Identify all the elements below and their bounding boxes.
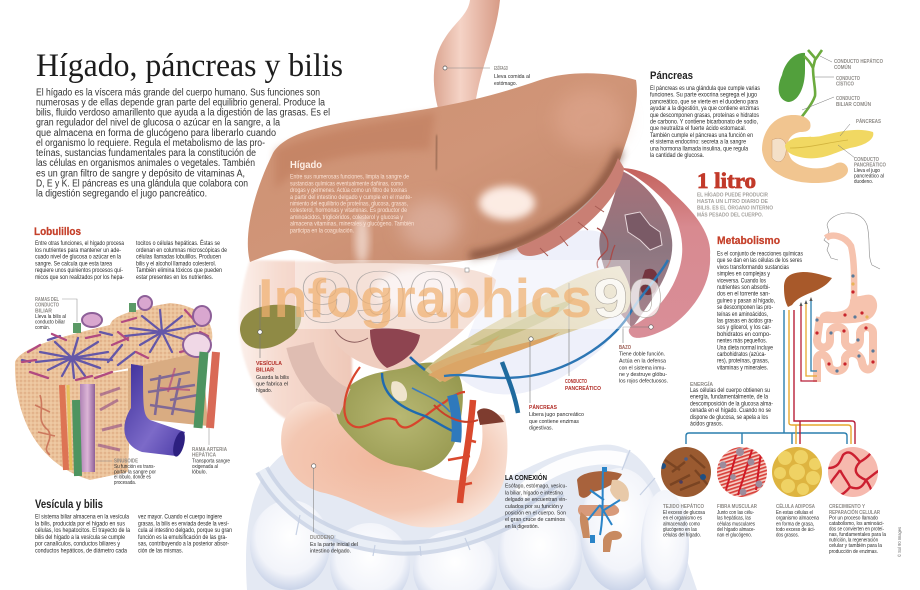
duodenum [281,401,507,527]
Metabolismo heading: Metabolismo [717,235,780,247]
lobule labels: oxigenada al [192,464,218,470]
pyloric lip [335,330,368,342]
label: spleen: ne y destruye glóbu- [619,372,667,378]
intro text block: bilis, fluido verdoso amarillento que ayuda a la digestión de las grasas. Es el [36,108,330,119]
label: spleen: con el sistema inmu- [619,365,666,371]
Energía text: descomposición de la glucosa alma- [690,400,773,407]
cell captions: celular y también para la [829,543,883,549]
Vesícula y bilis text: la bilis, producida por el hígado en sus [35,520,125,527]
Vesícula y bilis text: por canalículos, conductos biliares y [35,541,121,548]
label: spleen: Actúa en la defensa [619,358,667,364]
intestine [817,317,873,382]
gallbladder diagram labels: CONDUCTO [836,76,860,82]
Lobulillos text: ordenan en columnas microscópicas de [136,247,227,254]
Metabolismo text: nentes más pequeños. [717,338,767,345]
gallbladder diagram labels: BILIAR COMÚN [836,101,871,108]
lobule labels: RAMAS DEL [35,297,60,303]
duodenum opening [477,408,504,425]
lobule labels: Su función es trans- [114,464,155,470]
pylorus opening [370,328,420,368]
la conexión callout: en la digestión. [505,524,539,530]
gallbladder diagram labels: duodeno. [854,179,873,185]
Vesícula y bilis text: cula al intestino delgado, porque su gran [138,527,232,534]
label: liver text: sustancias químicas eventualmente dañinas, como [290,180,403,187]
label: pancreas: digestivas. [529,426,553,432]
Energía text: ENERGÍA [690,380,713,388]
side wall [15,362,132,480]
intro text block: numerosas y de ellas depende gran parte del equilibrio general. Produce la [36,97,325,108]
Metabolismo text: res), proteínas, grasas, [717,358,769,365]
lobule labels: procesada. [114,480,136,486]
pale stomach outlet [322,263,496,372]
cell captions [663,502,887,555]
label: duodenum: Es la parte inicial del [310,542,358,548]
Páncreas heading: Páncreas [650,70,693,82]
intro text block: es un gran filtro de sangre y depósito de vitaminas A, [36,168,245,179]
label: liver text [290,160,414,234]
liver brown [784,272,832,307]
Lobulillos text: tocitos o células hepáticas. Éstas se [136,240,220,247]
intro text block: el organismo lo requiere. Regula el metabolismo de las pro- [36,138,265,149]
Vesícula y bilis text: bilis del hígado a la vesícula se cumple [35,534,125,541]
lobule labels: Lleva la bilis al [35,314,66,320]
cell captions: células musculares [717,521,755,527]
gallbladder diagram labels: PÁNCREAS [856,118,881,125]
gallbladder diagram labels: COMÚN [834,64,851,71]
Metabolismo text: que se dan en las células de los seres [717,257,802,264]
Metabolismo text: guíneo y pasan al hígado, [717,297,775,304]
pancreas [425,266,631,382]
leader lines [802,56,855,158]
label: pancreas: PÁNCREAS [529,404,557,411]
1 litro callout: 1 litro [697,168,756,193]
right vessels [198,352,204,428]
label: esophagus [443,64,530,87]
label: duodenum: intestino delgado. [310,548,351,554]
label: liver text: Hígado [290,160,322,171]
gallbladder diagram labels: PANCREÁTICO [854,162,886,169]
Metabolismo text: se descomponen las pro- [717,304,773,311]
label: liver text: Entre sus numerosas funciones, limpia la sangre de [290,174,410,181]
label: liver text: almacena vitaminas, minerales y glucógeno. También [290,221,414,228]
label: pancreas [529,337,584,432]
cell captions: En estas células el [776,510,813,516]
Vesícula y bilis text: vez mayor. Cuando el cuerpo ingiere [138,514,222,521]
Páncreas text: pancreático, que se vierte en el duodeno para [650,98,758,105]
intro text block [36,87,330,200]
lobule labels: RAMA ARTERIA [192,447,227,453]
ducts [801,50,822,118]
cell captions: Junto con las célu- [717,510,754,516]
gallbladder [240,305,301,349]
stomach fold [517,158,624,256]
lobule labels: BILIAR [35,308,52,314]
1 litro callout: BILIS. ES EL ÓRGANO INTERNO [697,204,773,212]
Metabolismo text: sos y glicerol, y los car- [717,324,771,331]
watermark: 990 [300,258,460,338]
left vessels [62,385,66,470]
lobule labels: el lóbulo, donde es [114,475,151,481]
intro text block: gran regulador del nivel de glucosa o azúcar en la sangre, a la [36,118,280,129]
title: Hígado, páncreas y bilis [36,48,343,84]
cell captions: células del hígado. [663,532,701,538]
Páncreas text: funciones. Su parte exocrina segrega el jugo [650,92,757,99]
Energía text [690,380,773,428]
label: pancreatic duct: CONDUCTO [565,379,587,385]
cell captions: dos se convierten en proteí- [829,527,884,533]
label: spleen: Tiene doble función. [619,352,665,358]
label: pancreas: que contiene enzimas [529,419,579,425]
gallbladder diagram labels: CONDUCTO [836,96,860,102]
gallbladder diagram labels: Lleva el jugo [854,168,880,174]
Lobulillos heading: Lobulillos [34,226,81,238]
cell captions: CRECIMIENTO Y [829,504,865,510]
cell captions: almacenado como [663,521,700,527]
stomach interior [597,170,672,328]
lobule labels: Transporta sangre [192,459,230,465]
Lobulillos text: los nutrientes para mantener un ade- [35,247,121,254]
peritoneum white-blue [455,230,632,394]
cell captions: en forma de grasa, [776,521,814,527]
Metabolismo text: carbohidratos (azúca- [717,351,766,358]
Páncreas text: la cantidad de glucosa. [650,152,704,159]
stomach [820,295,877,323]
cell captions: producción de enzimas. [829,549,878,555]
la conexión callout: Esófago, estómago, vesícu- [505,484,567,490]
Páncreas text: También cumple el páncreas una función en [650,132,753,139]
label: spleen [619,325,668,385]
esophagus [434,0,500,115]
cell captions: CÉLULA ADIPOSA [776,502,815,510]
label: pancreas: Libera jugo pancreático [529,412,584,418]
watermark [258,258,663,338]
Páncreas text: de carbono. Y contiene bicarbonato de sodio, [650,118,758,126]
label: duodenum: DUODENO [310,535,334,541]
nutrient dots [815,274,875,373]
label: spleen: los rojos defectuosos. [619,379,668,385]
Vesícula y bilis text: ción de las mismas. [138,547,183,554]
Páncreas text [650,85,760,159]
Páncreas text: una hormona llamada insulina, que regula [650,145,748,152]
cell captions: Por un proceso llamado [829,516,878,522]
central vein L [124,364,185,456]
cell captions: en el organismo es [663,516,702,522]
Páncreas text: el sistema endocrino: secreta a la sangre [650,139,746,146]
cell circle: liver tissue [660,447,711,497]
Lobulillos text: Entre otras funciones, el hígado procesa [35,240,124,247]
Lobulillos text: micos que son realizados por los hepa- [35,274,124,281]
copyright: © Sol 90 Images [896,526,902,557]
splenic vein [444,260,668,378]
label: gallbladder: BILIAR [256,368,274,374]
lobule labels: común. [35,325,50,331]
label: esophagus: Lleva comida al [494,74,530,80]
label: esophagus: estómago. [494,81,517,87]
sinusoids right [125,310,195,352]
Lobulillos text [35,240,227,281]
cell circle: muscle fiber [717,447,767,497]
label: liver text: drogas y gérmenes. Actúa como un filtro de toxinas [290,187,407,194]
lobule labels: HEPÁTICA [192,452,216,459]
olive organ [336,363,463,471]
cell captions: del hígado almace- [717,527,755,533]
label: liver text: participa en la coagulación. [290,227,354,234]
label: gallbladder: hígado. [256,388,272,394]
watermark: 90 [593,267,663,329]
gallbladder diagram labels: pancreático al [854,174,884,180]
spleen crescent [620,168,710,338]
Lobulillos text: sangre. Se calcula que esta tarea [35,260,112,267]
cell captions: glucógeno en las [663,527,697,533]
la conexión callout: posición en el cuerpo. Son [505,510,566,516]
label: duodenum [310,464,358,554]
Lobulillos text: células llamadas lobulillos. Producen [136,254,221,261]
purple rings [73,296,211,472]
Metabolismo text: simples en complejas y [717,271,771,278]
Lobulillos text: bilis y el alcohol llamado colesterol. [136,260,216,267]
digestive tract [826,236,854,300]
lobule illustration [15,296,216,480]
metabolism diagram [686,213,880,444]
intro text block: D, E y K. El páncreas es una glándula que colabora con [36,178,248,190]
cell captions: TEJIDO HEPÁTICO [663,503,704,510]
label: gallbladder [256,285,289,394]
gallbladder diagram labels: CÍSTICO [836,80,854,88]
Lobulillos text: También elimina tóxicos que pueden [136,267,222,274]
sinusoids left [22,332,135,378]
Metabolismo text: vivos transformando sustancias [717,264,789,271]
vessels on organ [344,357,478,503]
cell circle: fat cell [772,447,822,497]
cell captions: nan el glucógeno. [717,532,752,538]
duodenum C [762,115,848,183]
gallbladder diagram labels: CONDUCTO HEPÁTICO [834,58,883,65]
liver [248,73,637,266]
label: liver text: nimiento del equilibrio de proteínas, glucosa, grasas, [290,200,408,208]
cell captions: organismo almacena [776,516,820,522]
intro text block: las células en organismos animales o vegetales. También [36,158,255,169]
mini diagram: digestive connection [577,467,629,552]
Vesícula y bilis text: función es la emulsificación de las gra- [138,534,227,541]
la conexión callout: el gran cruce de caminos [505,517,565,523]
Vesícula y bilis text [35,514,232,554]
label: liver text: aminoácidos, triglicéridos, colesterol y glucosa y [290,214,404,221]
intro text block: teínas, sustancias fundamentales para la constitución de [36,148,256,159]
cut wall [128,345,208,426]
la conexión callout: culados por su función y [505,504,563,510]
Metabolismo text: bohidratos en compo- [717,331,771,338]
head outline [824,213,880,269]
Metabolismo text: teínas en aminoácidos, [717,311,768,318]
lobule labels: SINUSOIDE [114,459,138,465]
intro text block: la digestión segregando el jugo pancreático. [36,189,207,200]
1 litro callout: MÁS PESADO DEL CUERPO. [697,211,763,218]
Metabolismo text: nutrientes son absorbi- [717,284,770,291]
cell captions: dos grasos. [776,532,799,538]
gallbladder diagram labels [834,58,886,185]
label: gallbladder: VESÍCULA [256,359,282,367]
cell circle: growth and repair [828,447,880,497]
label: gallbladder: Guarda la bilis [256,375,289,381]
Energía text: energía, fundamentalmente, de la [690,394,768,401]
cell captions: todo exceso de áci- [776,527,815,533]
1 litro callout [697,168,773,218]
cell captions: REPARACIÓN CELULAR [829,508,880,516]
cell captions: catabolismo, los aminoáci- [829,521,884,527]
Metabolismo text: Una dieta normal incluye [717,344,773,351]
cell captions: las hepáticas, las [717,516,751,522]
Lobulillos text: requiere unos quinientos procesos quí- [35,267,123,274]
cell captions: El exceso de glucosa [663,510,706,516]
cell captions: nas, fundamentales para la [829,532,887,538]
distribution lines [686,310,855,444]
label: gallbladder: que fabrica el [256,382,288,388]
lobule labels: lóbulo. [192,469,207,475]
main anatomy illustration [239,0,710,590]
lobule labels [35,297,230,486]
la conexión callout [505,473,567,530]
la conexión callout: LA CONEXIÓN [505,473,547,482]
label: pancreatic duct [565,283,602,392]
Lobulillos text: estar presentes en los nutrientes. [136,274,213,281]
lobule labels: conducto biliar [35,319,65,325]
lobule labels: CONDUCTO [35,303,59,309]
Lobulillos text: cuado nivel de glucosa o azúcar en la [35,254,121,261]
Metabolismo text: vitaminas y minerales. [717,364,768,371]
lobule labels: portar la sangre por [114,469,156,475]
Vesícula y bilis text: El sistema biliar almacena en la vesícula [35,514,129,521]
label: liver text: colesterol, hormonas y vitaminas. Es productor de [290,207,408,214]
pale body under the liver [239,260,352,428]
pancreas yellow [785,130,873,158]
Metabolismo text: Es el conjunto de reacciones químicas [717,250,803,258]
gallbladder green [779,53,805,102]
Páncreas text: que neutraliza el fuerte ácido estomacal. [650,125,746,132]
gallbladder and pancreas diagram [762,50,873,183]
intro text block: El hígado es la víscera más grande del cuerpo humano. Sus funciones son [36,87,320,98]
Páncreas text: ayudar a la digestión, ya que contiene enzimas [650,105,759,112]
la conexión callout: delgado se encuentran vin- [505,497,567,503]
Energía text: ácidos grasos. [690,420,723,428]
Vesícula y bilis text: conductos hepáticos, de diámetro cada [35,547,127,554]
label: spleen: BAZO [619,345,631,351]
Vesícula y bilis text: células, los hepatocitos. El trayecto de la [35,527,130,534]
Vesícula y bilis heading: Vesícula y bilis [35,499,103,511]
gallbladder diagram labels: CONDUCTO [854,157,879,163]
Energía text: Las células del cuerpo obtienen su [690,387,770,394]
Páncreas text: que descomponen grasas, proteínas e hidratos [650,112,759,119]
absorption lines [799,297,817,381]
Vesícula y bilis text: grasas, la bilis es enviada desde la vesí- [138,520,229,527]
Energía text: cenada en el hígado. Cuando no se [690,407,771,414]
cell captions: FIBRA MUSCULAR [717,504,757,510]
1 litro callout: HASTA UN LITRO DIARIO DE [697,199,768,205]
Metabolismo text [717,250,803,371]
intro text block: que almacena en forma de glucógeno para liberarlo cuando [36,128,276,139]
la conexión callout: la biliar, hígado e intestino [505,490,563,496]
label: liver text: a partir del intestino delgado y cumple en el mante- [290,194,412,201]
cell captions: nutrición, la regeneración [829,538,878,544]
Metabolismo text: viceversa. Cuando los [717,277,766,284]
label: esophagus: ESÓFAGO [494,64,508,72]
connecting tube [300,345,345,402]
Metabolismo text: dos en el torrente san- [717,291,770,298]
small intestine loops [246,445,697,590]
Energía text: dispone de glucosa, se apela a los [690,414,768,421]
Páncreas text: El páncreas es una glándula que cumple varias [650,85,760,92]
Vesícula y bilis text: sas, contribuyendo a la posterior absor- [138,541,229,548]
top surface [15,303,212,382]
label: pancreatic duct: PANCREÁTICO [565,385,602,392]
1 litro callout: EL HÍGADO PUEDE PRODUCIR [697,190,768,198]
watermark: Infographics [258,267,592,329]
Metabolismo text: las grasas en ácidos gra- [717,318,773,324]
portal vein [502,362,518,413]
